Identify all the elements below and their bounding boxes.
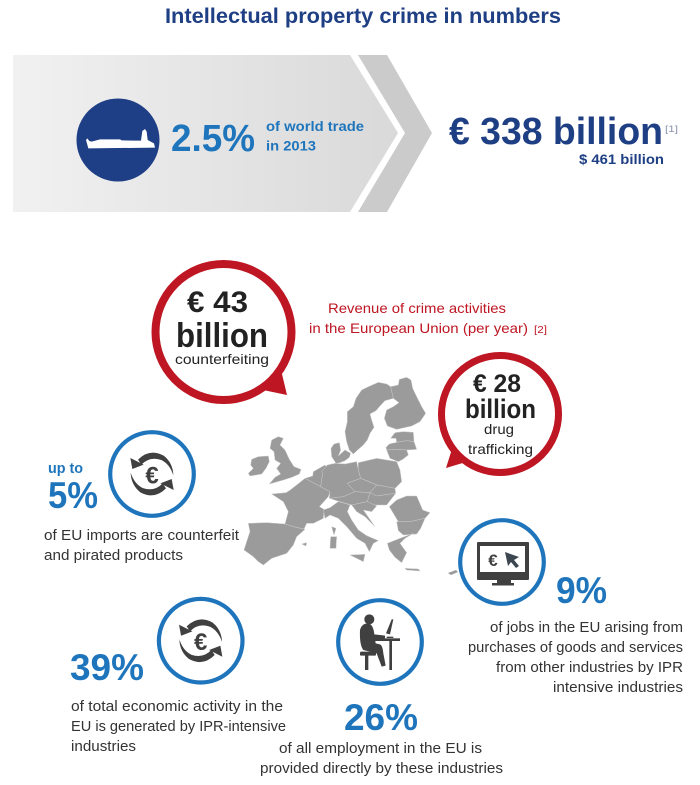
heading: revenue of crime activities: [2] [534,324,547,336]
stat block: 26% employment [260,600,503,777]
text: jobs description [468,620,683,696]
heading: revenue of crime activities: Revenue of crime activities [328,300,506,316]
speech bubble [156,264,292,400]
callout: drug trafficking [442,356,558,472]
stat: 28 billion: € 28 [473,370,521,398]
text: economic activity description [71,699,286,755]
text: in 2013: in 2013 [266,138,316,154]
text: imports description: and pirated products [44,548,183,564]
text: imports description: of EU imports are counterfeit [44,528,239,544]
callout: counterfeiting [156,264,292,400]
stat: 5%: 5% [48,475,98,516]
stat block: 9% jobs [460,520,683,696]
text: drug trafficking: drug [484,421,514,437]
stat: 461 billion dollar: $ 461 billion [579,151,664,167]
stat: 43 billion: € 43 [187,286,248,319]
arrow: chevron [358,55,432,212]
text: employment description: of all employment in the EU is [279,741,482,757]
text: economic activity description: industries [71,739,136,755]
text: jobs description: of jobs in the EU arising from [490,620,683,636]
heading: revenue of crime activities [309,300,547,336]
text: jobs description: from other industries by IPR [496,660,683,676]
title: Intellectual property crime in numbers [165,4,561,28]
stat: 26%: 26% [344,697,418,738]
arrow: main grey arrow [13,55,398,212]
icon: monitor with euro and cursor: € [488,551,498,570]
text: of world trade: of world trade [266,118,364,134]
text: economic activity description: EU is generated by IPR-intensive [71,719,286,735]
text: jobs description: purchases of goods and services [468,640,683,656]
icon: euro cycle [159,599,242,682]
icon: cargo ship [76,98,160,182]
panel: world trade banner [13,55,432,212]
stat block: 39% economic activity [70,599,286,755]
text: employment description [260,741,503,777]
icon: euro cycle [110,432,194,516]
stat: 2.5%: 2.5% [171,118,255,160]
map: European Union [244,377,430,571]
text: employment description: provided directly by these industries [260,761,503,777]
stat: 338 billion euro: € 338 billion [449,111,663,153]
callout: counterfeiting: billion [176,317,268,355]
text: jobs description: intensive industries [553,680,683,696]
reference 1: [1] [665,124,678,135]
heading: revenue of crime activities: in the European Union (per year) [309,320,528,336]
text: counterfeiting: counterfeiting [175,351,269,367]
speech bubble [442,356,558,472]
stat block: 5% imports [44,432,239,564]
text: up to: up to [48,461,83,477]
icon: Cyprus [448,570,458,575]
icon: monitor with euro and cursor [460,520,544,604]
text: economic activity description: of total economic activity in the [71,699,283,715]
stat: 39%: 39% [70,647,144,688]
callout: drug trafficking: trafficking [468,441,533,457]
callout: drug trafficking: billion [465,394,536,424]
icon: person at desk [338,600,422,684]
text: imports description [44,528,239,564]
stat: 9%: 9% [556,570,607,611]
